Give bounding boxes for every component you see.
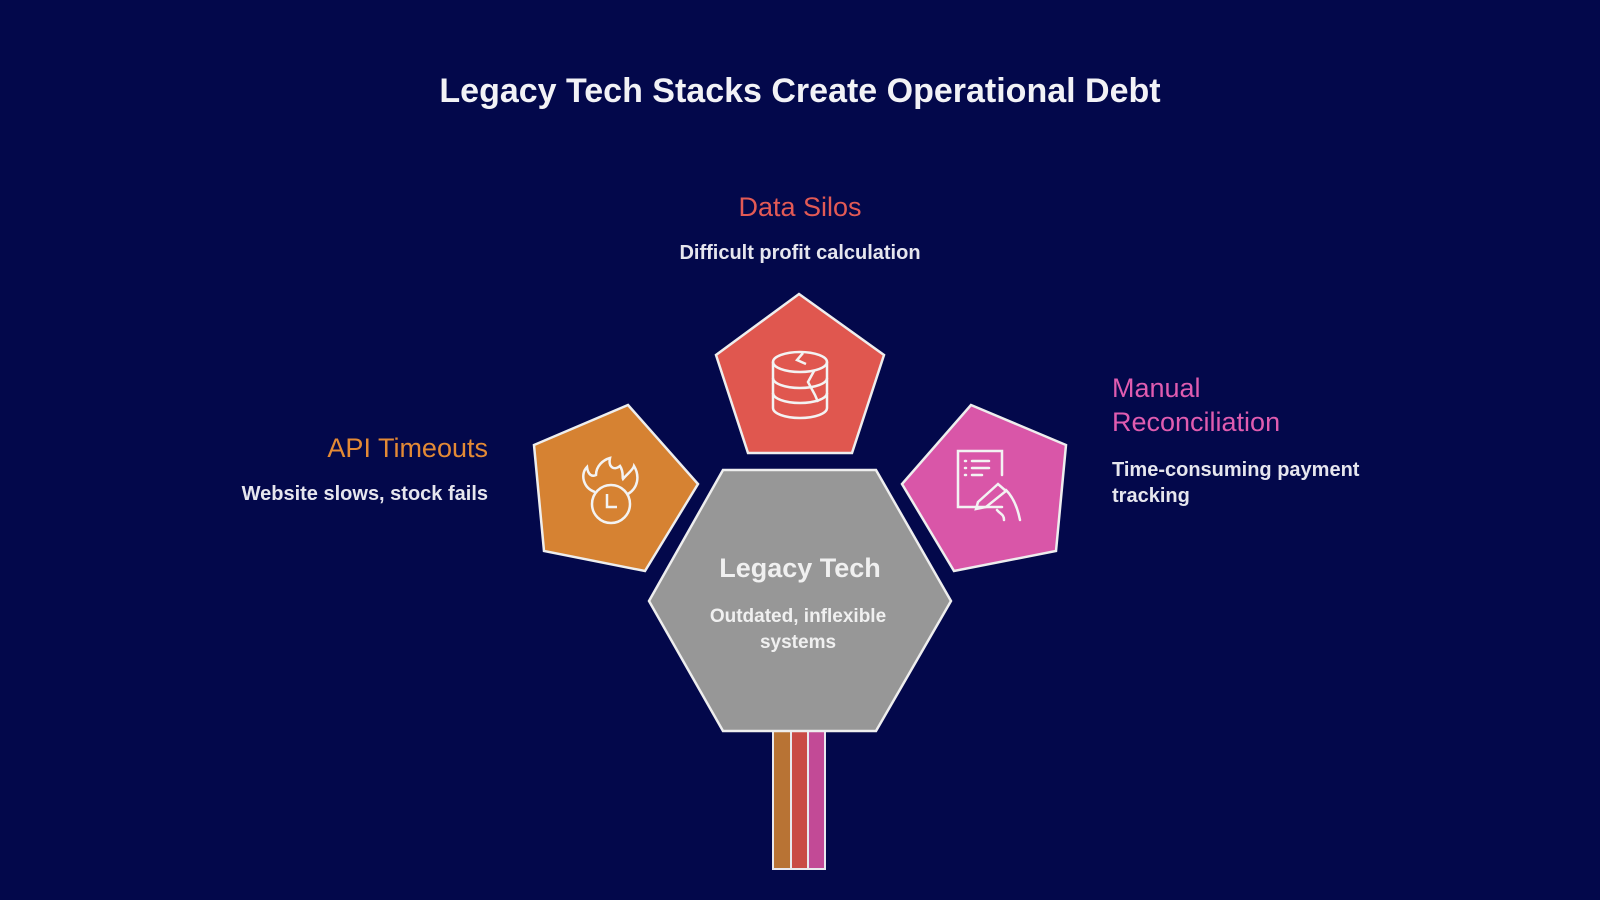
hexagon: Legacy Tech: Outdated, inflexible: [710, 606, 886, 627]
icon: document with pen: [958, 451, 1020, 520]
label: Manual Reconciliation: [1112, 373, 1280, 437]
label: API Timeouts: API Timeouts: [327, 433, 488, 463]
pentagon: API Timeouts: [534, 405, 698, 571]
desc: Manual Reconciliation: tracking: [1112, 485, 1190, 507]
label: Data Silos: Data Silos: [738, 192, 862, 222]
icon: clock on fire: [583, 458, 637, 523]
title: Legacy Tech Stacks Create Operational Debt: [439, 72, 1161, 110]
label: Manual Reconciliation: Reconciliation: [1112, 407, 1280, 437]
desc: Data Silos: Difficult profit calculation: [679, 242, 921, 264]
pentagon: Data Silos: [716, 294, 884, 453]
pentagon: Manual Reconciliation: [902, 405, 1066, 571]
desc: Manual Reconciliation: Time-consuming payment: [1112, 459, 1359, 481]
hexagon: Legacy Tech: Legacy Tech: [719, 553, 881, 583]
desc: API Timeouts: Website slows, stock fails: [242, 483, 488, 505]
label: Manual Reconciliation: Manual: [1112, 373, 1201, 403]
stem bars: [773, 731, 825, 869]
hexagon: Legacy Tech: systems: [760, 632, 836, 653]
icon: database cracked: [773, 352, 827, 418]
hexagon: Legacy Tech: [649, 470, 951, 731]
desc: Manual Reconciliation: [1112, 459, 1360, 507]
